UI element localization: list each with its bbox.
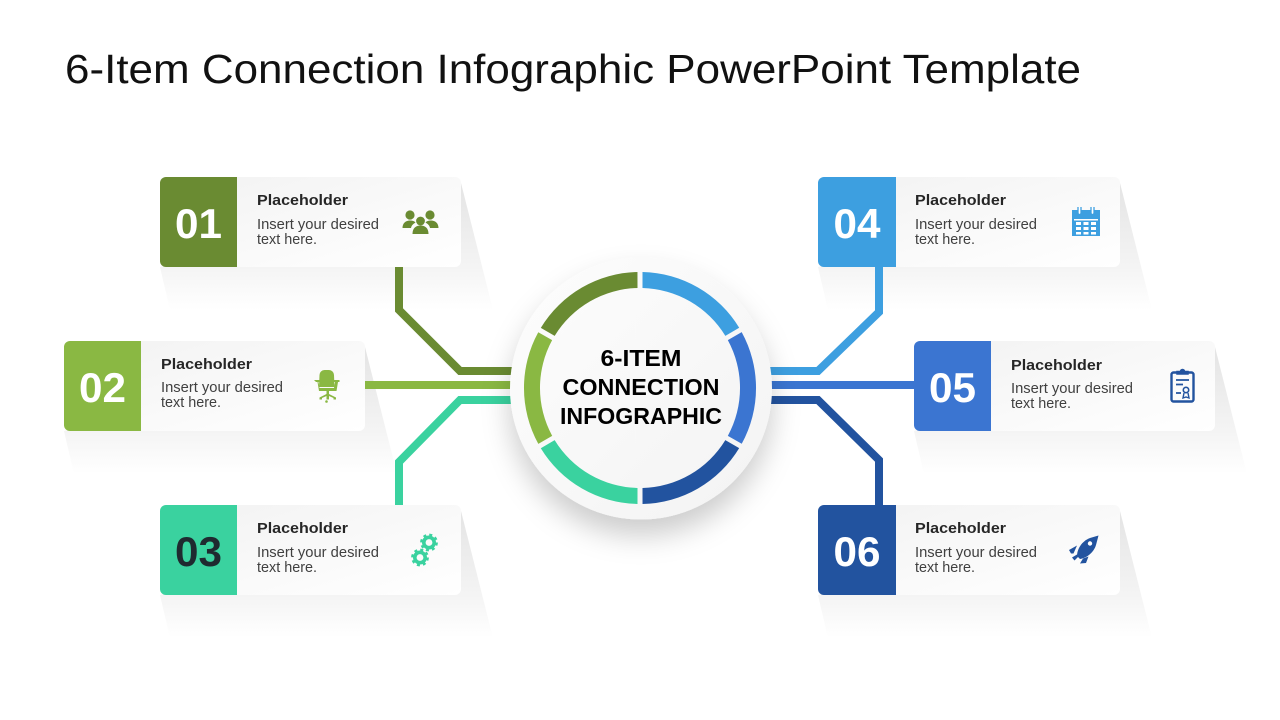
ring segment 03 <box>541 440 638 504</box>
card 06 text: Insert your desired <box>915 545 1037 561</box>
card 01 text: text here. <box>257 232 317 248</box>
card 06 shadow <box>818 511 1152 638</box>
card 03 shadow <box>160 511 493 638</box>
card 03 heading: Placeholder <box>257 520 348 537</box>
hub label: INFOGRAPHIC <box>560 403 722 429</box>
card 05 heading: Placeholder <box>1011 357 1102 374</box>
card 06 number: 06 <box>834 528 880 575</box>
card 02 body <box>64 341 365 431</box>
ring segment 06 <box>636 416 739 532</box>
title: 6-Item Connection Infographic PowerPoint Template <box>65 46 1081 92</box>
icon: rocket <box>1069 536 1098 564</box>
connector 06 <box>768 400 879 505</box>
connector 02 <box>365 381 512 389</box>
card 03 text: text here. <box>257 560 317 576</box>
card 03 number badge <box>160 505 237 595</box>
ring segment 05 <box>686 332 790 448</box>
card 06 number badge <box>818 505 896 595</box>
central hub <box>490 244 790 532</box>
card 05 number: 05 <box>929 364 976 411</box>
hub label: 6-ITEM <box>600 345 682 371</box>
card 02 text: Insert your desired <box>161 380 283 396</box>
hub label <box>560 345 722 429</box>
card 01 text: Insert your desired <box>257 217 379 233</box>
card 05 text: text here. <box>1011 396 1071 412</box>
icon: calendar <box>1072 207 1100 236</box>
card 04 text <box>915 217 1037 248</box>
card 01 heading: Placeholder <box>257 192 348 209</box>
card 02 shadow <box>64 347 397 474</box>
card 04 <box>818 177 1152 310</box>
card 02 number badge <box>64 341 141 431</box>
icon: clipboard certificate <box>1172 370 1194 402</box>
card 02 text: text here. <box>161 395 221 411</box>
card 02 number: 02 <box>79 364 126 411</box>
card 03 number: 03 <box>175 528 222 575</box>
connector 03 <box>399 400 512 505</box>
card 02 heading: Placeholder <box>161 356 252 373</box>
card 01 number: 01 <box>175 200 222 247</box>
hub disc <box>510 258 772 520</box>
card 01 body <box>160 177 461 267</box>
card 01 shadow <box>160 183 493 310</box>
icon: people <box>402 210 438 234</box>
card 06 text: text here. <box>915 560 975 576</box>
ring segment 04 <box>642 272 739 336</box>
connector 04 <box>768 267 879 371</box>
card 04 body <box>818 177 1120 267</box>
card 02 text <box>161 380 283 411</box>
card 06 body <box>818 505 1120 595</box>
icon: gears <box>412 535 437 565</box>
hub label: CONNECTION <box>562 374 720 400</box>
connector 01 <box>399 267 512 371</box>
card 03 body <box>160 505 461 595</box>
card 05 body <box>914 341 1215 431</box>
card 05 text <box>1011 381 1133 412</box>
card 05 number badge <box>914 341 991 431</box>
card 02 <box>64 341 397 474</box>
icon: office chair <box>314 370 340 403</box>
card 06 <box>818 505 1152 638</box>
card 04 shadow <box>818 183 1152 310</box>
connector 05 <box>768 381 914 389</box>
card 05 shadow <box>914 347 1247 474</box>
card 03 <box>160 505 493 638</box>
card 04 text: Insert your desired <box>915 217 1037 233</box>
card 05 text: Insert your desired <box>1011 381 1133 397</box>
card 01 <box>160 177 493 310</box>
ring segment 02 <box>490 328 594 444</box>
card 01 text <box>257 217 379 248</box>
card 04 text: text here. <box>915 232 975 248</box>
card 03 text <box>257 545 379 576</box>
card 04 number badge <box>818 177 896 267</box>
ring segment 01 <box>541 244 644 360</box>
card 03 text: Insert your desired <box>257 545 379 561</box>
card 01 number badge <box>160 177 237 267</box>
card 04 heading: Placeholder <box>915 192 1006 209</box>
card 06 text <box>915 545 1037 576</box>
card 06 heading: Placeholder <box>915 520 1006 537</box>
card 05 <box>914 341 1247 474</box>
card 04 number: 04 <box>834 200 881 247</box>
